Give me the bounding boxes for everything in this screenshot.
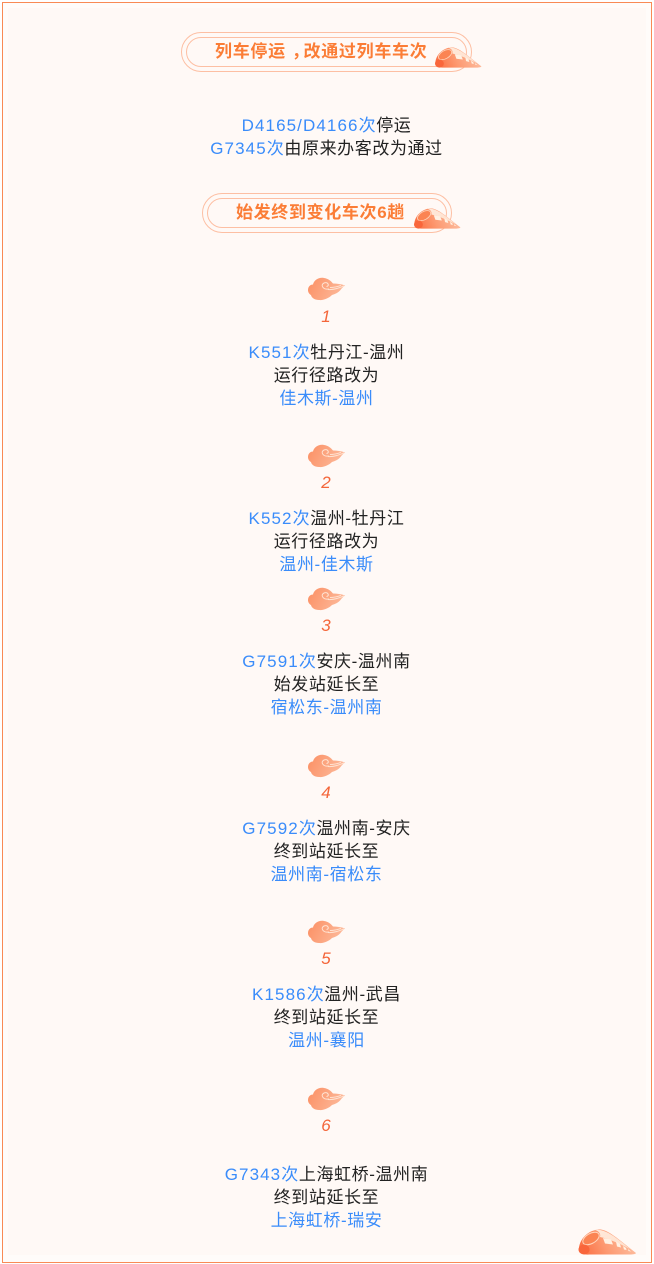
number 1: 1 [321, 307, 331, 326]
icon: cloud 2 [308, 444, 345, 468]
text block: K551: 运行径路改为 [274, 366, 379, 385]
text block: K1586: 终到站延长至 [274, 1008, 379, 1027]
text block: K552: 温州-佳木斯 [279, 555, 374, 574]
text block: K1586: 温州-襄阳 [288, 1031, 365, 1050]
text block: K552 [248, 509, 404, 574]
heading: suspended trains: 列车停运 ，改通过列车车次 [215, 42, 427, 61]
text block: suspended trains: D4165/D4166次停运 [242, 116, 411, 135]
heading: changed origin and terminal trains: 始发终到变化车次6趟 [236, 203, 405, 222]
text block: K1586 [252, 985, 401, 1050]
number 4: 4 [321, 783, 331, 802]
text block: K551: K551次牡丹江-温州 [248, 343, 404, 362]
icon: cloud 3 [308, 588, 345, 610]
text block: G7592: 终到站延长至 [274, 842, 379, 861]
number 2: 2 [321, 473, 331, 492]
text block: G7591: 宿松东-温州南 [271, 698, 382, 717]
text block: G7591: 始发站延长至 [274, 675, 379, 694]
icon: cloud 4 [308, 754, 345, 778]
text block: K551: 佳木斯-温州 [279, 389, 374, 408]
number 6: 6 [321, 1116, 331, 1135]
text block: K551 [248, 343, 404, 408]
text block: suspended trains: G7345次由原来办客改为通过 [210, 139, 443, 158]
icon: cloud 6 [308, 1088, 345, 1110]
number 3: 3 [321, 616, 331, 635]
text block: K1586: K1586次温州-武昌 [252, 985, 401, 1004]
heading: suspended trains [181, 32, 472, 72]
text block: G7592 [242, 819, 411, 884]
icon: train on heading 1 [435, 47, 482, 68]
number 5: 5 [321, 949, 331, 968]
icon: cloud 1 [308, 278, 345, 300]
text block: G7591: G7591次安庆-温州南 [242, 652, 411, 671]
text block: suspended trains [210, 116, 443, 158]
text block: G7343: G7343次上海虹桥-温州南 [225, 1165, 428, 1184]
icon: train on heading 2 [414, 208, 460, 229]
icon: cloud 5 [308, 920, 345, 944]
text block: G7343 [225, 1165, 428, 1230]
text block: G7343: 上海虹桥-瑞安 [271, 1211, 382, 1230]
text block: G7592: 温州南-宿松东 [271, 865, 382, 884]
text block: K552: K552次温州-牡丹江 [248, 509, 404, 528]
text block: G7592: G7592次温州南-安庆 [242, 819, 411, 838]
icon: train bottom right [578, 1229, 636, 1255]
heading: changed origin and terminal trains [202, 193, 452, 233]
text block: K552: 运行径路改为 [274, 532, 379, 551]
text block: G7343: 终到站延长至 [274, 1188, 379, 1207]
text block: G7591 [242, 652, 411, 717]
